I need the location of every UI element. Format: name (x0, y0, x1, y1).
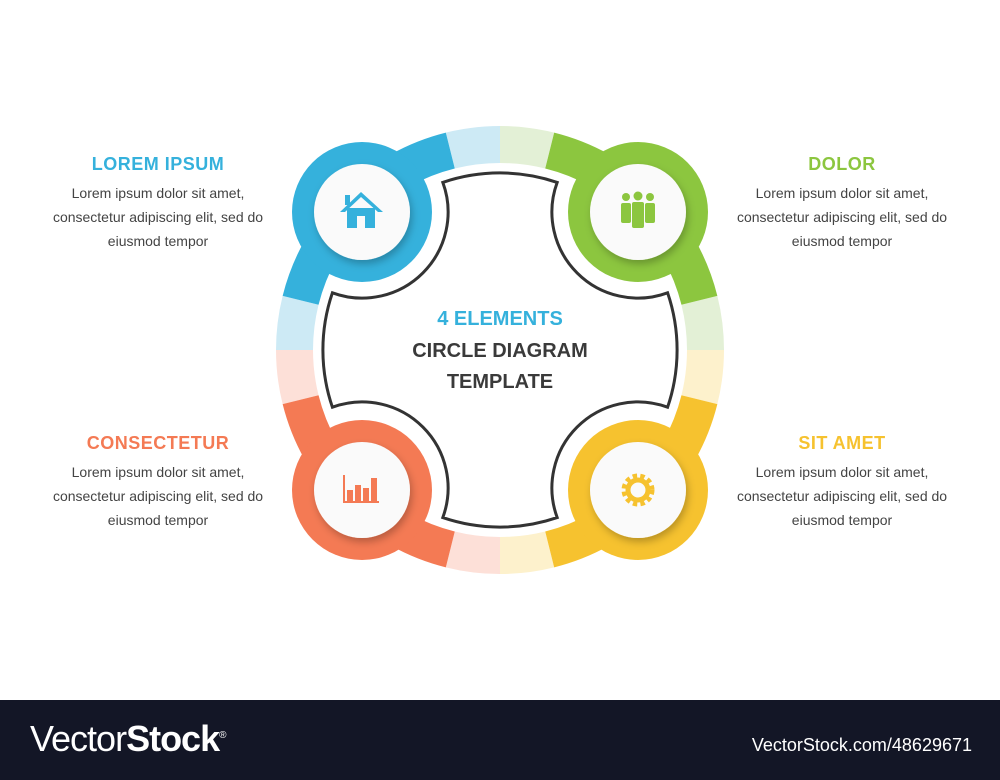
center title: TEMPLATE (447, 371, 553, 393)
text block: dolor: Lorem ipsum dolor sit amet, consectetur adipiscing elit, sed do eiusmod tempor (737, 185, 947, 249)
text block: lorem ipsum: Lorem ipsum dolor sit amet, consectetur adipiscing elit, sed do eiusmod tempor (53, 185, 263, 249)
text block: lorem ipsum (53, 154, 263, 249)
text block: sit amet (737, 433, 947, 528)
footer url: VectorStock.com/48629671 (752, 735, 972, 755)
white icon discs (314, 164, 686, 538)
text block: lorem ipsum: LOREM IPSUM (92, 154, 224, 174)
text block: consectetur: Lorem ipsum dolor sit amet, consectetur adipiscing elit, sed do eiusmod tempor (53, 464, 263, 528)
center title: CIRCLE DIAGRAM (412, 340, 588, 362)
colored node circles (292, 142, 708, 560)
icon: gear (625, 477, 651, 503)
text block: sit amet: Lorem ipsum dolor sit amet, consectetur adipiscing elit, sed do eiusmod tempor (737, 464, 947, 528)
footer logo: VectorStock® (30, 718, 225, 759)
icon: people (621, 192, 655, 228)
text block: consectetur: CONSECTETUR (87, 433, 229, 453)
icon: house (340, 192, 383, 228)
icon: bar chart (343, 475, 379, 503)
text block: dolor (737, 154, 947, 249)
center title: 4 ELEMENTS (437, 308, 563, 330)
text block: sit amet: SIT AMET (798, 433, 886, 453)
central outline shape (323, 173, 677, 527)
text block: consectetur (53, 433, 263, 528)
text block: dolor: DOLOR (808, 154, 876, 174)
ring segments (294, 144, 706, 556)
center title (412, 308, 588, 393)
footer bar (0, 700, 1000, 780)
